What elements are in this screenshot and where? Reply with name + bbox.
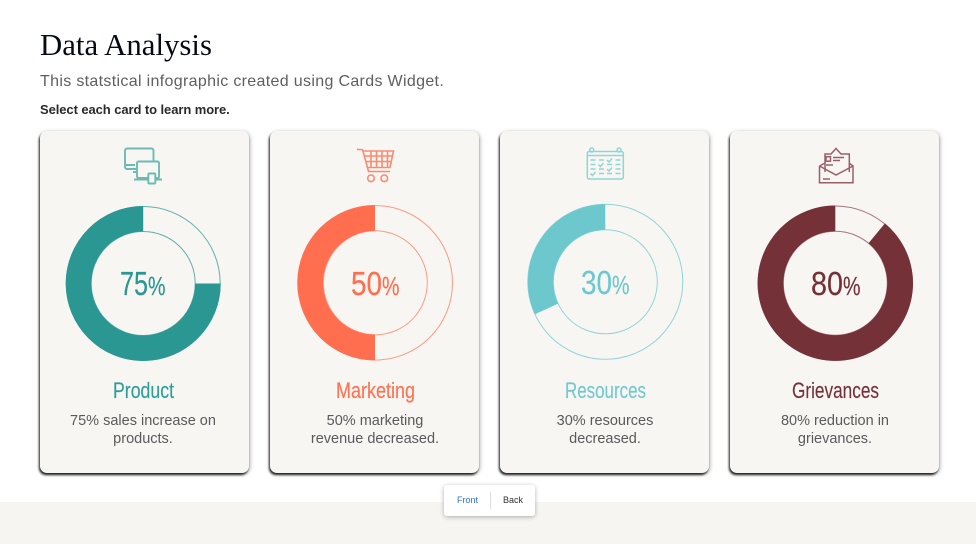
heading: grievances: Grievances bbox=[792, 378, 879, 403]
panel: grievances card bbox=[730, 131, 939, 473]
donut chart: 75% bbox=[66, 206, 221, 361]
description: grievances. bbox=[798, 431, 872, 447]
percent sign: % bbox=[148, 271, 166, 301]
icon: open envelope bbox=[820, 148, 853, 183]
panel: marketing card bbox=[270, 131, 479, 473]
percent sign: % bbox=[843, 271, 860, 301]
toggle: front / back bbox=[444, 485, 535, 516]
divider bbox=[490, 492, 491, 509]
heading: resources: Resources bbox=[565, 378, 646, 403]
description: revenue decreased. bbox=[311, 431, 439, 447]
back button: Back bbox=[503, 495, 523, 505]
donut chart: 80% bbox=[758, 206, 913, 361]
percent sign: % bbox=[382, 271, 400, 301]
subtitle: This statstical infographic created using Cards Widget. bbox=[40, 73, 444, 90]
donut chart: 30% bbox=[528, 204, 683, 359]
footer band bbox=[0, 502, 976, 544]
percent sign: % bbox=[612, 270, 630, 300]
instruction: Select each card to learn more. bbox=[40, 102, 230, 117]
description bbox=[311, 413, 439, 447]
heading: product: Product bbox=[113, 378, 174, 403]
percentage: 80%: 80 bbox=[811, 265, 843, 302]
description bbox=[70, 413, 216, 447]
icon: calendar bbox=[587, 148, 623, 179]
description bbox=[557, 413, 653, 447]
title: Data Analysis bbox=[40, 28, 212, 62]
percentage: 75%: 75 bbox=[120, 265, 148, 302]
panel: product card bbox=[40, 131, 249, 473]
heading: marketing: Marketing bbox=[336, 378, 415, 403]
description: 30% resources bbox=[557, 413, 653, 429]
front button: Front bbox=[457, 495, 478, 505]
panel: resources card bbox=[500, 131, 709, 473]
description: decreased. bbox=[569, 431, 641, 447]
icon: shopping cart bbox=[357, 149, 394, 182]
percentage: 30%: 30 bbox=[581, 264, 612, 301]
description: products. bbox=[113, 431, 173, 447]
description: 50% marketing bbox=[327, 413, 423, 429]
description: 80% reduction in bbox=[781, 413, 889, 429]
percentage: 50%: 50 bbox=[351, 265, 382, 302]
donut chart: 50% bbox=[297, 205, 452, 360]
description: 75% sales increase on bbox=[70, 413, 216, 429]
description bbox=[781, 413, 889, 447]
icon: devices bbox=[125, 148, 162, 184]
